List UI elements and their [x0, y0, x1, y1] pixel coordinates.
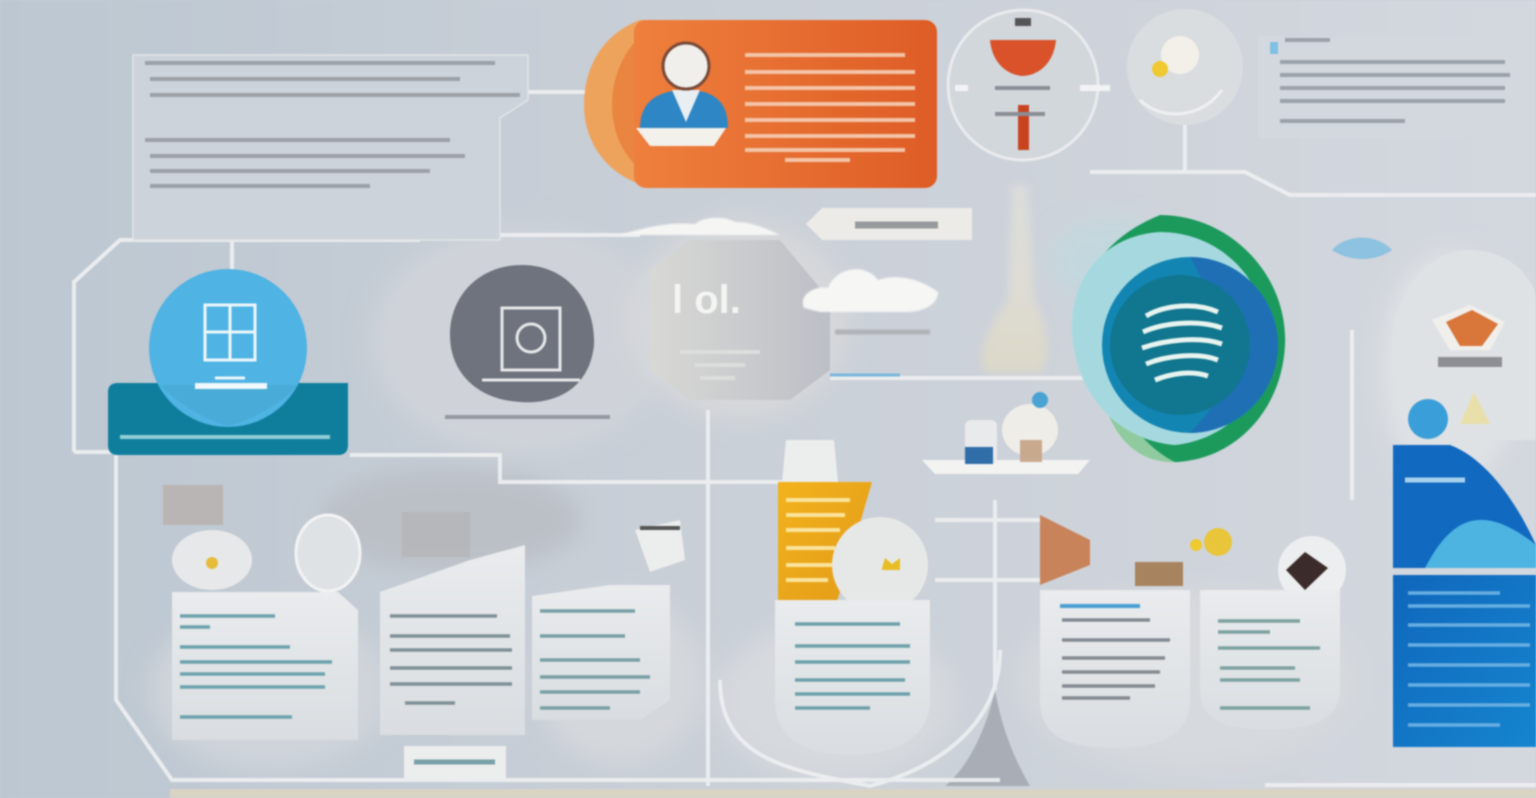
- card 4: [775, 600, 930, 755]
- panel: blue bottom right: [1393, 575, 1536, 747]
- card 1: [172, 592, 358, 740]
- cloud: large: [803, 269, 938, 332]
- panel: orange card: [584, 20, 937, 188]
- icon: person: [636, 43, 728, 146]
- text lines: [145, 63, 520, 186]
- gray wedge: [945, 690, 1030, 786]
- small blue label: [830, 374, 900, 376]
- cloud: [620, 218, 780, 235]
- card 5: [1040, 590, 1190, 748]
- icon: gray circle with gear: [445, 265, 610, 417]
- icon: right circle: [1391, 250, 1536, 440]
- card 6: [1200, 590, 1340, 730]
- panel: center chart: [650, 240, 830, 400]
- center glyphs: l ol.: [672, 278, 741, 322]
- soft background shapes: [150, 220, 1520, 780]
- cloud: small blue: [1332, 238, 1392, 259]
- card 2: [380, 545, 525, 735]
- cream column: [982, 185, 1047, 372]
- label pill: [806, 208, 972, 240]
- icon: DNA globe: [1072, 215, 1285, 462]
- small label box: [404, 746, 506, 778]
- panel: blue top right: [1393, 445, 1536, 568]
- panel: top left text: [133, 55, 528, 240]
- card 3: [532, 585, 670, 720]
- text lines: [745, 55, 915, 160]
- banner: teal: [108, 383, 348, 455]
- icon: funnel in circle: [948, 10, 1110, 160]
- panel: top right text: [1258, 36, 1516, 138]
- dna strands: [1142, 306, 1222, 380]
- tray with supplies: [922, 392, 1090, 474]
- icons: small items row: [1040, 515, 1346, 604]
- icon: bottle and yellow banner: [778, 440, 928, 613]
- icon: bulb circle: [1127, 9, 1243, 125]
- icons: upper left items: [163, 485, 685, 591]
- bottom band: [170, 789, 1536, 798]
- icon: blue circle with monitor: [149, 269, 307, 427]
